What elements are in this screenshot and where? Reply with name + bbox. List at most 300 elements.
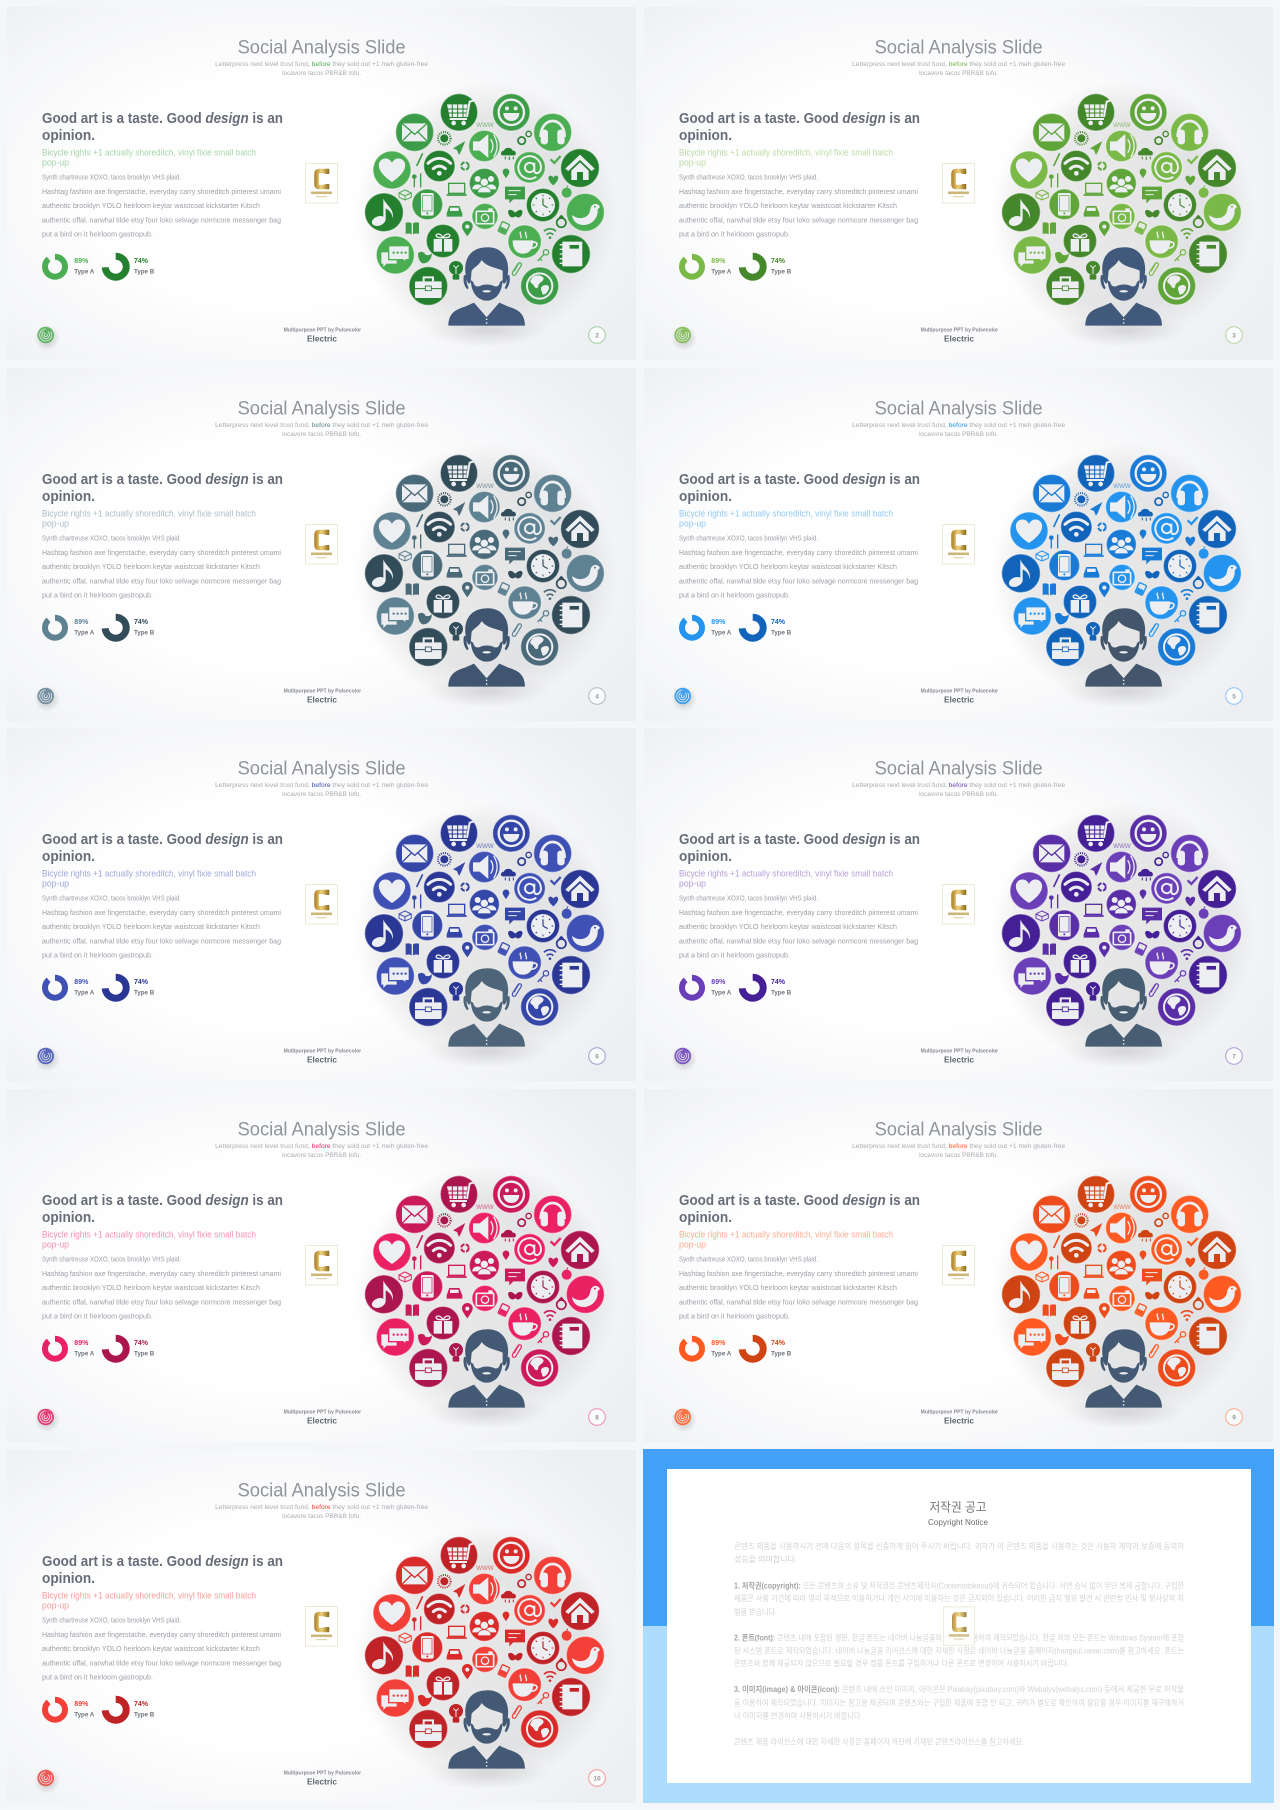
coloured subheading xyxy=(42,868,256,889)
icon: fingerprint xyxy=(34,1046,60,1072)
icon: headphones xyxy=(1171,474,1209,512)
footer credit: Electric xyxy=(944,1055,974,1065)
coloured subheading xyxy=(679,1228,893,1249)
icon: globe xyxy=(521,1349,559,1387)
coloured subheading xyxy=(42,1228,256,1249)
www label: www xyxy=(1112,481,1131,490)
body text: authentic offal, narwhal tilde etsy four loko selvage normcore messenger bag xyxy=(42,1299,281,1306)
donut chart: Type A 89%: 89% xyxy=(74,258,89,265)
icon: notebook xyxy=(552,1317,590,1355)
donut chart: Type A 89%: Type A xyxy=(74,990,95,997)
icon: wifi xyxy=(424,150,455,182)
page number: 9 xyxy=(1232,1414,1236,1421)
page number xyxy=(1226,327,1242,343)
coloured subheading: Bicycle rights +1 actually shoreditch, vinyl fixie small batch xyxy=(42,1589,256,1600)
footer credit: Electric xyxy=(944,1416,974,1426)
icon: gift xyxy=(426,1667,460,1700)
title: Social Analysis Slide xyxy=(238,1480,406,1501)
subtitle: locavore tacos PBR&B tofu. xyxy=(282,431,361,438)
subtitle xyxy=(852,61,1065,77)
icon: gift xyxy=(1063,946,1097,979)
subtitle xyxy=(215,782,428,798)
person xyxy=(448,1329,525,1408)
copyright title: 저작권 공고 xyxy=(930,1500,986,1514)
copyright paragraph: font: 된 시스템 폰트로 제작되었습니다. 네이버 나눔글꼴 라이선스에 대한 자세한 사항은 네이버 나눔글꼴 홈페이지(hangeul.naver.com)를 참고하세요. 폰트는 xyxy=(734,1646,1184,1656)
donut chart: Type B 74%: Type B xyxy=(134,268,155,275)
footer credit: Multipurpose PPT by Pulsecolor xyxy=(284,328,361,334)
icon: phone xyxy=(1049,910,1080,941)
page number xyxy=(589,1048,605,1065)
icon: heart xyxy=(373,1233,411,1271)
small scattered icons xyxy=(1036,131,1209,280)
donut chart: Type A 89%: 89% xyxy=(74,1701,89,1708)
icon: bird xyxy=(1203,193,1241,231)
icon: home xyxy=(1198,870,1236,909)
heading: opinion. xyxy=(679,849,732,865)
body text: Synth chartreuse XOXO, tacos brooklyn VHS plaid. xyxy=(679,1256,818,1263)
icon: speaker xyxy=(469,1573,500,1604)
copyright paragraph: intro: 셨음을 의미합니다. xyxy=(734,1554,797,1564)
subtitle: locavore tacos PBR&B tofu. xyxy=(282,791,361,798)
body text: put a bird on it heirloom gastropub. xyxy=(42,953,153,960)
icon: globe xyxy=(1158,267,1196,305)
icon: gift xyxy=(1063,224,1097,258)
icon: heart xyxy=(373,872,411,910)
icon: at sign xyxy=(1151,152,1182,183)
footer credit: Multipurpose PPT by Pulsecolor xyxy=(284,1770,361,1776)
icon: coffee xyxy=(508,946,541,980)
icon: phone xyxy=(412,1271,443,1302)
www label: www xyxy=(1112,1202,1131,1211)
icon: wifi xyxy=(1061,511,1092,542)
icon: camera xyxy=(472,1646,498,1672)
donut chart: Type A 89%: Type A xyxy=(74,629,95,636)
donut chart: Type A 89%: Type A xyxy=(711,268,732,275)
page number: 2 xyxy=(595,332,599,339)
icon: smile xyxy=(493,815,530,852)
icon: chat xyxy=(1013,597,1051,635)
donut chart: Type B 74% xyxy=(742,1338,792,1359)
coloured subheading xyxy=(679,868,893,889)
heading: opinion. xyxy=(42,849,95,865)
footer credit: Multipurpose PPT by Pulsecolor xyxy=(921,1049,998,1055)
subtitle: locavore tacos PBR&B tofu. xyxy=(919,70,998,77)
icon: at sign xyxy=(514,512,545,544)
donut chart: Type A 89%: 89% xyxy=(711,979,726,986)
icon: globe xyxy=(1158,1349,1196,1387)
icon: cart xyxy=(1077,94,1115,131)
icon: headphones xyxy=(1171,835,1209,873)
title: Social Analysis Slide xyxy=(875,38,1043,58)
donut chart: Type B 74%: Type B xyxy=(134,1711,155,1718)
icon: speaker xyxy=(1106,1212,1137,1244)
icon: headphones xyxy=(1171,1195,1209,1233)
small scattered icons xyxy=(399,1213,572,1362)
copyright paragraph: image and icon xyxy=(734,1684,1184,1720)
icon: wifi xyxy=(424,511,455,542)
icon: camera xyxy=(472,925,498,951)
icon: phone xyxy=(412,910,443,941)
body text: authentic brooklyn YOLO heirloom keytar waistcoat kickstarter Kitsch xyxy=(679,564,897,571)
person xyxy=(448,969,525,1047)
page number xyxy=(1226,1048,1242,1065)
heading: Good art is a taste. Good design is an xyxy=(42,111,283,127)
body text xyxy=(679,535,918,599)
body text: put a bird on it heirloom gastropub. xyxy=(679,232,790,238)
icon: briefcase xyxy=(409,267,448,305)
icon: group xyxy=(469,529,499,559)
body text: authentic offal, narwhal tilde etsy four loko selvage normcore messenger bag xyxy=(679,1299,918,1306)
footer credit xyxy=(921,1049,998,1065)
donut chart: Type B 74% xyxy=(105,256,155,277)
icon: wifi xyxy=(424,1232,455,1264)
body text: Hashtag fashion axe fingerstache, everyday carry shoreditch pinterest umami xyxy=(42,910,281,917)
icon: gift xyxy=(426,224,460,258)
icon: clock xyxy=(1163,188,1197,222)
subtitle: Letterpress next level trust fund, before they sold out +1 meh gluten-free xyxy=(215,422,428,429)
body text: Hashtag fashion axe fingerstache, everyday carry shoreditch pinterest umami xyxy=(42,550,281,557)
body text: authentic brooklyn YOLO heirloom keytar waistcoat kickstarter Kitsch xyxy=(679,1285,897,1292)
icon: fingerprint xyxy=(34,686,60,712)
logo badge xyxy=(306,524,338,564)
icon: home xyxy=(1198,1231,1236,1269)
donut chart: Type A 89%: 89% xyxy=(711,619,726,626)
heading xyxy=(42,1554,283,1587)
icon: music xyxy=(1002,554,1040,592)
panel: slide 3 light green xyxy=(673,7,1273,360)
subtitle: Letterpress next level trust fund, before they sold out +1 meh gluten-free xyxy=(215,782,428,789)
body text xyxy=(42,535,281,599)
icon: cart xyxy=(440,1176,478,1213)
body text: put a bird on it heirloom gastropub. xyxy=(42,1674,153,1681)
small scattered icons xyxy=(1036,1213,1209,1362)
donut chart: Type B 74%: Type B xyxy=(134,629,155,636)
icon: speaker xyxy=(1106,852,1137,883)
person xyxy=(448,608,525,686)
icon: chat xyxy=(376,1318,414,1356)
icon: cart xyxy=(440,1536,478,1574)
small scattered icons xyxy=(1036,492,1209,640)
footer credit xyxy=(284,328,361,344)
icon: wifi xyxy=(1061,1232,1092,1264)
coloured subheading: pop-up xyxy=(42,878,69,889)
icon: notebook xyxy=(1189,595,1227,634)
heading: opinion. xyxy=(679,128,732,144)
icon: music xyxy=(1002,914,1040,953)
heading xyxy=(679,111,920,144)
heading xyxy=(679,832,920,865)
icon: heart xyxy=(1010,512,1048,550)
footer credit xyxy=(284,1770,361,1786)
icon: fingerprint xyxy=(671,1046,697,1072)
www label: www xyxy=(475,481,494,490)
icon: cart xyxy=(440,815,478,852)
body text: Synth chartreuse XOXO, tacos brooklyn VHS plaid. xyxy=(679,174,818,182)
icon: camera xyxy=(472,203,498,229)
page number xyxy=(589,1769,605,1786)
icon: camera xyxy=(1109,1285,1135,1311)
icon: globe xyxy=(1158,988,1196,1026)
icon: globe xyxy=(1158,628,1196,666)
body text: Synth chartreuse XOXO, tacos brooklyn VHS plaid. xyxy=(679,535,818,542)
coloured subheading: pop-up xyxy=(679,156,706,168)
small scattered icons xyxy=(1036,853,1209,1001)
coloured subheading: pop-up xyxy=(42,517,69,528)
footer credit: Electric xyxy=(307,694,337,704)
icon: music xyxy=(365,1275,403,1314)
icon: chat xyxy=(376,597,414,635)
donut chart: Type B 74%: Type B xyxy=(771,268,792,275)
donut chart: Type A 89% xyxy=(682,257,732,277)
icon: envelope xyxy=(1033,1195,1071,1233)
icon: headphones xyxy=(534,113,572,151)
icon: phone xyxy=(412,1632,443,1662)
body text: Hashtag fashion axe fingerstache, everyday carry shoreditch pinterest umami xyxy=(679,1271,918,1278)
www label: www xyxy=(475,1563,494,1572)
icon: briefcase xyxy=(1046,988,1085,1027)
icon: notebook xyxy=(552,235,590,273)
heading: opinion. xyxy=(42,1571,95,1587)
icon: heart xyxy=(1010,1233,1048,1271)
icon cluster xyxy=(992,1164,1255,1429)
icon: home xyxy=(561,870,599,909)
copyright paragraph: font: 2. 폰트(font): 콘텐츠 내에 포함된 영문, 한글 폰트는 네이버 나눔글꼴의 폰트를 사용하여 제작되었습니다. 한글 외의 모든 폰트는 Windows System에 포함 xyxy=(734,1632,1185,1642)
body text: Synth chartreuse XOXO, tacos brooklyn VHS plaid. xyxy=(42,1617,181,1624)
panel: copyright notice xyxy=(643,1449,1274,1803)
icon: bird xyxy=(1203,915,1241,953)
subtitle xyxy=(215,1504,428,1520)
panel: slide 5 blue xyxy=(673,368,1273,721)
donut chart: Type A 89%: Type A xyxy=(74,1350,95,1357)
person xyxy=(1085,247,1162,326)
icon: envelope xyxy=(396,474,434,512)
icon: phone xyxy=(1049,550,1080,580)
icon cluster xyxy=(355,1524,618,1790)
title: Social Analysis Slide xyxy=(238,398,406,419)
icon: clock xyxy=(526,188,560,222)
icon: home xyxy=(561,1591,599,1630)
donut chart: Type A 89% xyxy=(45,617,95,637)
body text: Synth chartreuse XOXO, tacos brooklyn VHS plaid. xyxy=(42,1256,181,1263)
panel: slide 6 indigo xyxy=(36,728,636,1081)
coloured subheading xyxy=(679,507,893,528)
footer credit: Multipurpose PPT by Pulsecolor xyxy=(921,328,998,334)
footer credit: Electric xyxy=(307,1416,337,1426)
icon: at sign xyxy=(1151,512,1182,544)
icon: smile xyxy=(493,94,530,131)
icon: globe xyxy=(521,267,559,305)
icon: fingerprint xyxy=(34,325,60,351)
icon: briefcase xyxy=(409,627,448,666)
panel: slide 2 green xyxy=(36,7,636,360)
footer credit xyxy=(284,1410,361,1426)
icon: chat xyxy=(376,236,414,274)
donut chart: Type B 74% xyxy=(742,617,792,638)
icon: at sign xyxy=(514,873,545,904)
logo badge xyxy=(306,1245,338,1285)
body text: Synth chartreuse XOXO, tacos brooklyn VHS plaid. xyxy=(42,535,181,542)
panel: slide 8 pink xyxy=(36,1089,636,1442)
body text xyxy=(42,896,281,960)
heading: Good art is a taste. Good design is an xyxy=(42,832,283,848)
icon: cart xyxy=(440,94,478,131)
icon cluster xyxy=(992,803,1255,1069)
icon: headphones xyxy=(534,1195,572,1233)
heading: Good art is a taste. Good design is an xyxy=(42,472,283,488)
icon: clock xyxy=(1163,549,1197,582)
icon: speaker xyxy=(1106,491,1137,522)
icon: at sign xyxy=(1151,873,1182,904)
donut chart: Type A 89%: 89% xyxy=(74,979,89,986)
heading xyxy=(679,472,920,505)
www label: www xyxy=(475,1202,494,1211)
icon: speaker xyxy=(1106,130,1137,162)
icon: group xyxy=(469,168,499,198)
icon: cart xyxy=(1077,454,1115,492)
title: Social Analysis Slide xyxy=(875,398,1043,419)
icon: smile xyxy=(1130,1176,1167,1213)
donut chart: Type B 74% xyxy=(742,256,792,277)
icon: bird xyxy=(1203,1275,1241,1313)
body text xyxy=(679,174,918,238)
small scattered icons xyxy=(399,1574,572,1722)
icon: at sign xyxy=(1151,1234,1182,1265)
coloured subheading xyxy=(42,507,256,528)
icon: notebook xyxy=(552,1677,590,1716)
icon: clock xyxy=(1163,910,1197,943)
icon: music xyxy=(365,554,403,592)
icon: music xyxy=(365,914,403,953)
icon: fingerprint xyxy=(671,1407,697,1433)
donut chart: Type A 89% xyxy=(682,617,732,637)
icon: coffee xyxy=(1145,586,1178,619)
icon: coffee xyxy=(1145,225,1178,258)
footer credit xyxy=(921,688,998,704)
icon: clock xyxy=(526,1631,560,1664)
body text: put a bird on it heirloom gastropub. xyxy=(679,1313,790,1320)
donut chart: Type B 74%: 74% xyxy=(771,1340,786,1347)
icon: camera xyxy=(1109,925,1135,951)
icon: chat xyxy=(1013,1318,1051,1356)
subtitle xyxy=(215,1143,428,1159)
subtitle xyxy=(215,61,428,77)
icon: cart xyxy=(1077,1176,1115,1213)
icon: envelope xyxy=(396,835,434,873)
icon: wifi xyxy=(1061,150,1092,182)
coloured subheading: pop-up xyxy=(679,517,706,528)
copyright paragraph: copyright: 1. 저작권(copyright): 모든 콘텐츠의 소유 및 저작권은 콘텐츠제작사(Contentstokeout)에 귀속되어 있습니다. 서면 승낙 없이 무단 복제 금합니다. 구입한 xyxy=(734,1580,1185,1590)
icon: briefcase xyxy=(409,1349,448,1387)
body text xyxy=(679,1256,918,1320)
body text: put a bird on it heirloom gastropub. xyxy=(42,232,153,238)
icon: chat xyxy=(376,1679,414,1717)
page number xyxy=(589,327,605,343)
subtitle: locavore tacos PBR&B tofu. xyxy=(282,70,361,77)
heading: Good art is a taste. Good design is an xyxy=(679,472,920,488)
subtitle: locavore tacos PBR&B tofu. xyxy=(282,1152,361,1159)
heading: opinion. xyxy=(42,489,95,505)
body text: put a bird on it heirloom gastropub. xyxy=(679,953,790,960)
coloured subheading: pop-up xyxy=(42,1599,69,1610)
icon: speaker xyxy=(469,491,500,522)
small scattered icons xyxy=(399,131,572,280)
www label: www xyxy=(475,841,494,850)
donut chart: Type B 74% xyxy=(105,977,155,998)
icon: envelope xyxy=(396,1195,434,1233)
body text: authentic offal, narwhal tilde etsy four loko selvage normcore messenger bag xyxy=(679,218,918,224)
copyright paragraph: font xyxy=(734,1632,1185,1668)
subtitle: locavore tacos PBR&B tofu. xyxy=(919,1152,998,1159)
heading: opinion. xyxy=(42,128,95,144)
icon: briefcase xyxy=(409,988,448,1027)
icon: heart xyxy=(1010,872,1048,910)
donut chart: Type B 74%: Type B xyxy=(134,990,155,997)
body text: authentic brooklyn YOLO heirloom keytar waistcoat kickstarter Kitsch xyxy=(42,924,260,931)
footer credit: Multipurpose PPT by Pulsecolor xyxy=(284,688,361,694)
icon: wifi xyxy=(424,1593,455,1624)
body text: put a bird on it heirloom gastropub. xyxy=(42,592,153,599)
donut chart: Type B 74%: Type B xyxy=(771,990,792,997)
icon: fingerprint xyxy=(671,325,697,351)
icon: smile xyxy=(493,454,530,492)
logo badge xyxy=(306,164,338,203)
person xyxy=(1085,969,1162,1047)
heading: Good art is a taste. Good design is an xyxy=(679,1193,920,1209)
title: Social Analysis Slide xyxy=(875,759,1043,780)
page number: 7 xyxy=(1232,1054,1236,1061)
donut chart: Type B 74%: 74% xyxy=(134,1340,149,1347)
body text: authentic offal, narwhal tilde etsy four loko selvage normcore messenger bag xyxy=(42,939,281,946)
page number xyxy=(1226,1409,1242,1425)
icon: headphones xyxy=(1171,113,1209,151)
footer credit xyxy=(921,328,998,344)
subtitle xyxy=(852,422,1065,438)
icon: envelope xyxy=(396,1556,434,1594)
donut chart: Type A 89%: Type A xyxy=(711,1350,732,1357)
coloured subheading: Bicycle rights +1 actually shoreditch, vinyl fixie small batch xyxy=(42,868,256,879)
icon: coffee xyxy=(1145,1307,1178,1340)
body text: authentic offal, narwhal tilde etsy four loko selvage normcore messenger bag xyxy=(679,578,918,585)
icon: heart xyxy=(373,151,411,189)
page number xyxy=(589,1409,605,1425)
icon: music xyxy=(365,1636,403,1674)
donut chart: Type B 74% xyxy=(105,1338,155,1359)
donut chart: Type A 89%: Type A xyxy=(711,990,732,997)
copyright paragraph: image and icon: 나 이미지를 변경하여 사용하시기 바랍니다. xyxy=(734,1710,862,1720)
page number: 3 xyxy=(1232,332,1236,339)
icon: notebook xyxy=(552,595,590,634)
footer credit: Multipurpose PPT by Pulsecolor xyxy=(921,1410,998,1416)
copyright paragraph: copyright: 벌을 받습니다. xyxy=(734,1606,777,1616)
www label: www xyxy=(1112,120,1131,129)
body text: authentic brooklyn YOLO heirloom keytar waistcoat kickstarter Kitsch xyxy=(679,924,897,931)
icon: briefcase xyxy=(409,1709,448,1748)
title: Social Analysis Slide xyxy=(875,1119,1043,1140)
heading: opinion. xyxy=(679,1210,732,1226)
body text: authentic offal, narwhal tilde etsy four loko selvage normcore messenger bag xyxy=(42,578,281,585)
icon: clock xyxy=(526,549,560,582)
icon: gift xyxy=(1063,1306,1097,1340)
page number: 4 xyxy=(595,693,599,700)
icon cluster xyxy=(355,442,618,708)
donut chart: Type A 89% xyxy=(682,1339,732,1359)
donut chart: Type B 74%: Type B xyxy=(134,1350,155,1357)
panel: slide 10 red xyxy=(36,1450,636,1803)
body text: Synth chartreuse XOXO, tacos brooklyn VHS plaid. xyxy=(42,174,181,182)
icon: headphones xyxy=(534,835,572,873)
donut chart: Type A 89% xyxy=(45,1339,95,1359)
logo badge xyxy=(942,524,974,564)
